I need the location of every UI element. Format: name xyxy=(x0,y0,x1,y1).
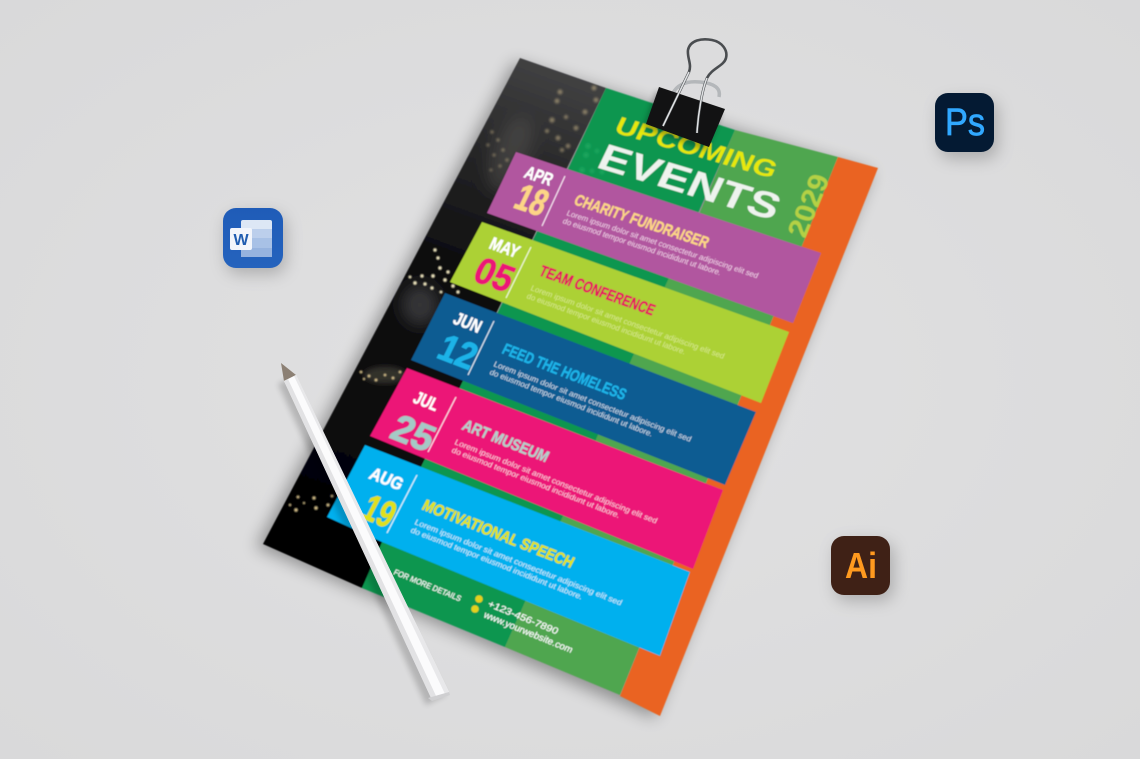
binder clip xyxy=(643,39,726,151)
event: motivational speech: MOTIVATIONAL SPEECH xyxy=(419,497,577,572)
event: charity fundraiser: Lorem ipsum dolor sit amet consectetur adipiscing elit sed xyxy=(565,209,760,280)
heading line: events: EVENTS xyxy=(591,137,787,228)
footer label: FOR MORE DETAILS xyxy=(392,568,463,603)
event: motivational speech: do eiusmod tempor eiusmod incididunt ut labore. xyxy=(409,526,584,601)
icon: globe xyxy=(471,605,479,613)
event: art museum: 25 xyxy=(384,408,442,460)
year: 2029 xyxy=(781,170,836,241)
event: motivational speech: Lorem ipsum dolor sit amet consectetur adipiscing elit sed xyxy=(413,518,624,607)
photo background with bokeh xyxy=(263,58,606,588)
website: www.yourwebsite.com xyxy=(481,610,575,656)
event: motivational speech xyxy=(327,445,690,656)
event: charity fundraiser: 18 xyxy=(508,177,555,225)
event: charity fundraiser: APR xyxy=(521,163,556,189)
event: team conference: MAY xyxy=(486,234,523,262)
event: feed the homeless: do eiusmod tempor eiusmod incididunt ut labore. xyxy=(488,368,654,438)
footer contact xyxy=(392,568,575,656)
event: motivational speech: 19 xyxy=(355,488,403,536)
event: feed the homeless xyxy=(411,293,756,485)
event: feed the homeless: 12 xyxy=(431,327,484,378)
orange stripe xyxy=(620,157,878,716)
event: art museum: Lorem ipsum dolor sit amet consectetur adipiscing elit sed xyxy=(453,438,659,525)
event: team conference: TEAM CONFERENCE xyxy=(536,263,658,319)
event: art museum: do eiusmod tempor eiusmod incididunt ut labore. xyxy=(450,446,622,520)
icon: word xyxy=(223,208,286,274)
event: team conference: do eiusmod tempor eiusmod incididunt ut labore. xyxy=(525,292,687,356)
event: motivational speech: AUG xyxy=(366,464,407,494)
heading line: upcoming: UPCOMING xyxy=(610,112,782,184)
event: team conference: Lorem ipsum dolor sit amet consectetur adipiscing elit sed xyxy=(529,284,726,361)
icon: photoshop xyxy=(935,93,998,159)
event: team conference xyxy=(450,222,789,403)
pencil xyxy=(278,363,450,705)
event: team conference: 05 xyxy=(467,250,521,301)
icon: photoshop: Ps xyxy=(945,102,985,144)
event: feed the homeless: JUN xyxy=(450,309,485,337)
flyer xyxy=(263,58,878,716)
event: feed the homeless: FEED THE HOMELESS xyxy=(499,341,629,404)
light green column xyxy=(505,130,838,695)
event: art museum: JUL xyxy=(410,388,442,415)
heading: upcoming events xyxy=(591,112,787,228)
event: charity fundraiser xyxy=(487,152,821,323)
event: charity fundraiser: CHARITY FUNDRAISER xyxy=(571,192,712,252)
event: feed the homeless: Lorem ipsum dolor sit amet consectetur adipiscing elit sed xyxy=(492,360,693,444)
icon: illustrator: Ai xyxy=(845,545,877,586)
phone number: +123-456-7890 xyxy=(486,599,560,637)
flyer shadow xyxy=(256,62,872,718)
event: charity fundraiser: do eiusmod tempor eiusmod incididunt ut labore. xyxy=(561,217,723,277)
icon: phone xyxy=(475,595,483,603)
dark green column xyxy=(362,88,735,647)
event: art museum: ART MUSEUM xyxy=(459,417,551,466)
event: art museum xyxy=(370,368,723,569)
icon: word: W xyxy=(233,232,249,249)
icon: illustrator xyxy=(831,536,894,601)
